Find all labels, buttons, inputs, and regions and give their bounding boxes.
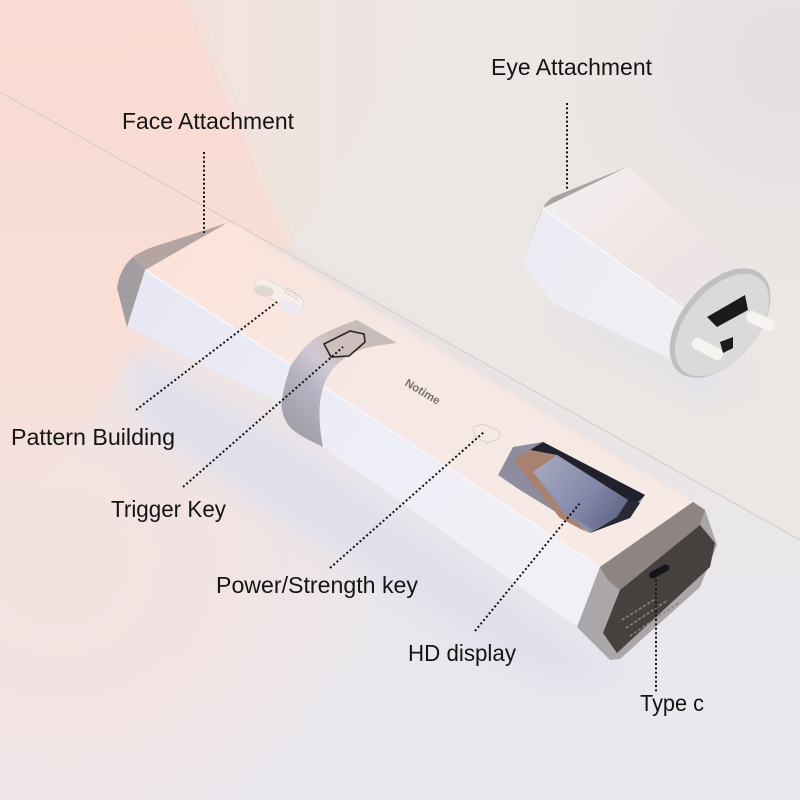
label: HD display: HD display (408, 640, 516, 666)
attachment grey top (522, 167, 627, 263)
leader: eye attachment (566, 103, 568, 190)
device shadow (130, 350, 620, 680)
body upper face (145, 223, 693, 567)
leader: type c (655, 575, 657, 693)
leader: power key (330, 432, 484, 568)
face head grey side (117, 257, 145, 327)
label: eye attachment: Eye Attachment (491, 54, 653, 80)
dotted leader lines (136, 103, 656, 693)
leader: trigger key (183, 347, 343, 487)
silver band (282, 320, 397, 447)
leader: pattern building (136, 302, 277, 410)
label: power/strength key: Power/Strength key (216, 572, 418, 598)
label: type c: Type c (640, 690, 704, 716)
leader: face attachment (203, 152, 205, 233)
labels (11, 54, 704, 716)
end cap (577, 502, 717, 660)
attachment cap (650, 250, 790, 396)
attachment shadow (553, 303, 760, 395)
display (498, 442, 645, 533)
label: pattern building: Pattern Building (11, 424, 175, 450)
attachment pins (752, 317, 769, 325)
eye attachment (522, 167, 790, 396)
main device (117, 223, 717, 680)
attachment ridge (543, 208, 685, 310)
upper face shading (237, 225, 693, 502)
attachment lower face (522, 208, 685, 360)
attachment body (522, 167, 743, 360)
face head grey top (133, 223, 227, 270)
body lower face (127, 270, 600, 627)
trigger key (324, 331, 365, 357)
brand name: Notime (402, 377, 442, 408)
leader: HD display (475, 503, 580, 631)
ridge highlight (145, 270, 600, 567)
type c port (648, 563, 671, 580)
label: trigger key: Trigger Key (111, 496, 226, 522)
label: face attachment: Face Attachment (122, 108, 295, 134)
pattern building slider (252, 275, 307, 318)
power key (473, 424, 500, 443)
